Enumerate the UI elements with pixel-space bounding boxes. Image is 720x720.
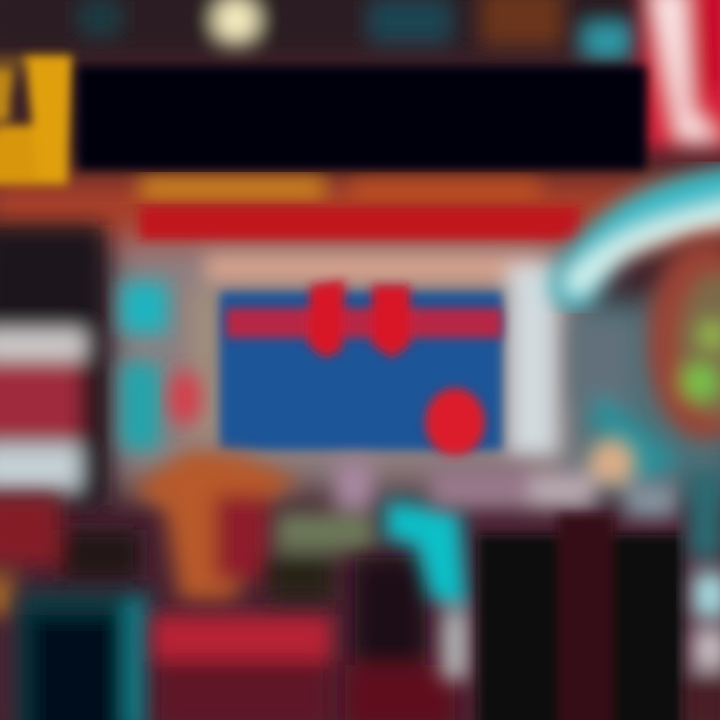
orange figure	[130, 450, 300, 600]
teal figure	[385, 500, 468, 680]
red seats left	[0, 495, 140, 615]
top strip with lights	[0, 0, 660, 60]
yellow letter sign	[0, 55, 72, 185]
red balloon left	[169, 370, 201, 426]
round emblem on the right	[647, 240, 720, 440]
red ribbon	[226, 280, 502, 358]
blue screen panel	[220, 280, 502, 450]
red balloon right	[425, 388, 485, 456]
teal column	[120, 282, 168, 450]
crowd silhouettes	[0, 438, 720, 720]
pale crowd right	[430, 438, 677, 518]
red subtitle bar	[140, 178, 540, 198]
far right edge	[688, 472, 720, 720]
neon sign top right	[640, 0, 720, 150]
dark teal figure	[18, 590, 150, 720]
background wall	[0, 175, 720, 720]
middle crowd	[268, 462, 375, 600]
red bar	[140, 207, 580, 239]
red seats centre	[152, 615, 332, 720]
grey panel right of the screen	[575, 320, 680, 490]
pale backdrop behind the screen	[190, 255, 558, 455]
teal swoosh	[575, 190, 720, 285]
striped column on the left	[0, 225, 105, 505]
dark figure centre	[345, 558, 455, 720]
black title panel	[78, 66, 646, 170]
dark standing figures right	[478, 515, 683, 720]
